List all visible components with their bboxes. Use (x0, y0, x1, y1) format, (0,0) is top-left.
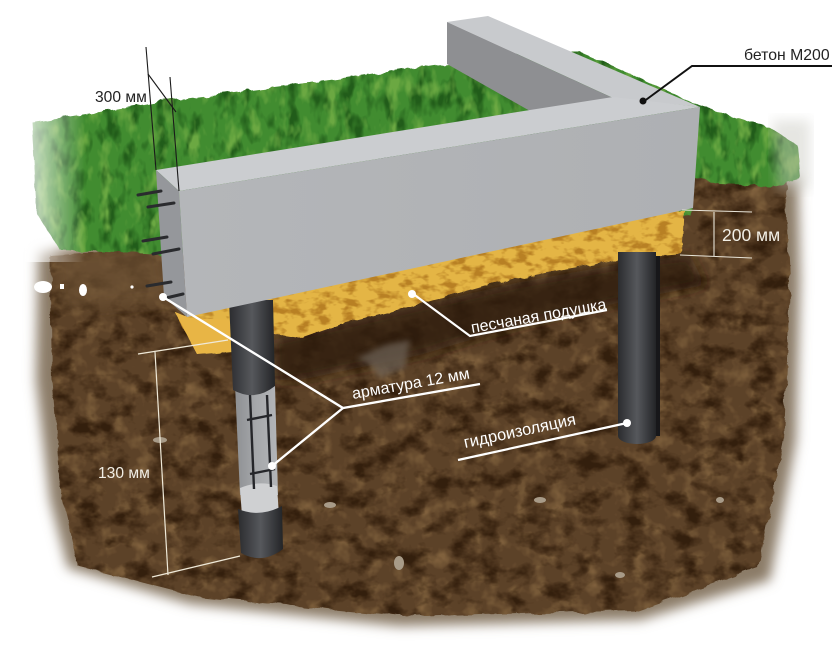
pile: left with cutaway (229, 300, 283, 558)
dimension: 300 mm (95, 47, 179, 191)
gray stain under sand (357, 340, 410, 378)
callout: concrete grade (640, 47, 832, 104)
concrete strip foundation (156, 16, 700, 317)
small white patches on the left soil edge (34, 281, 134, 296)
dimension: 300 mm: 300 мм (95, 89, 147, 106)
callout: rebar 12 mm (159, 293, 480, 470)
front face (179, 107, 700, 317)
dimension: 130 mm (98, 340, 240, 577)
sand cushion (175, 210, 684, 354)
rebar cage (247, 395, 275, 489)
side wing (447, 16, 700, 107)
soil block (36, 170, 800, 626)
pile: right (618, 252, 660, 444)
callout: waterproofing (458, 411, 631, 460)
callout: sand cushion: песчаная подушка (470, 296, 608, 337)
lower waterproofing sleeve (238, 506, 283, 558)
callout: concrete grade: бетон М200 (744, 47, 830, 64)
lighter topsoil band (55, 245, 170, 310)
callout: rebar 12 mm: арматура 12 мм (351, 366, 471, 403)
grass (25, 52, 810, 262)
dimension: 130 mm: 130 мм (98, 465, 150, 482)
end face (156, 170, 187, 317)
callout: waterproofing: гидроизоляция (462, 411, 577, 452)
dimension: 200 mm (680, 210, 780, 258)
dimension: 200 mm: 200 мм (722, 225, 780, 245)
dark shadow under sand (273, 255, 705, 380)
rebar ends (138, 191, 183, 298)
callout: sand cushion (408, 290, 608, 337)
concrete core (235, 385, 278, 495)
upper waterproofing sleeve (229, 300, 275, 395)
light concrete base (240, 483, 279, 516)
small stones (153, 437, 724, 578)
top face (156, 97, 700, 191)
